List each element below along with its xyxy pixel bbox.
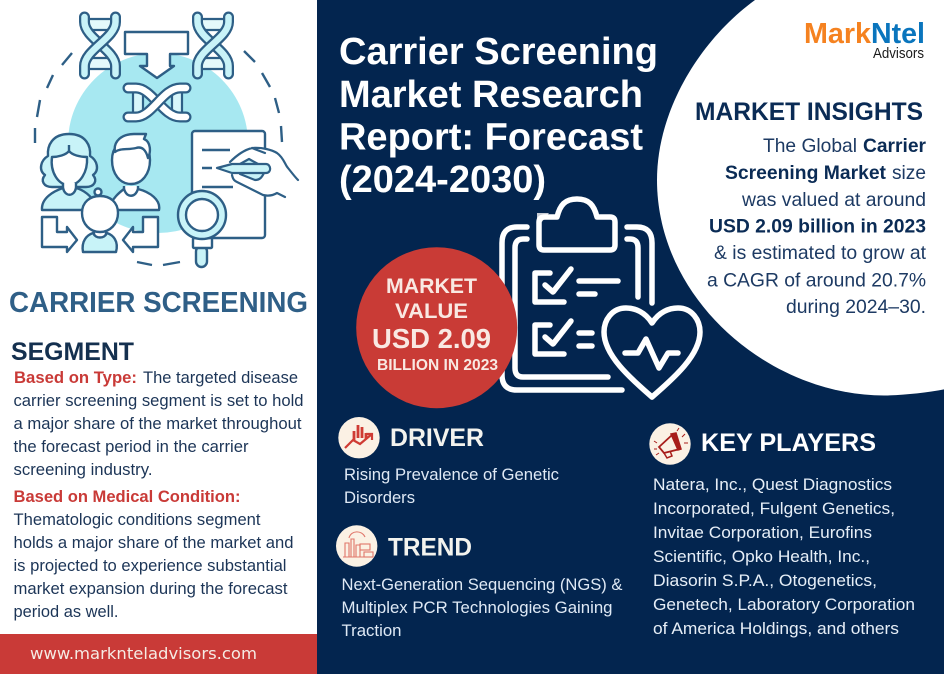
icon: father — [108, 134, 159, 210]
icon: right arrow to child — [123, 217, 158, 252]
icon: lab equipment — [336, 525, 377, 567]
heading: trend: TREND — [388, 534, 472, 562]
panel: white insights curve — [657, 0, 946, 396]
text: driver detail: Rising Prevalence of Genetic — [344, 465, 559, 484]
icon: horizontal DNA — [128, 88, 186, 117]
text block: based on type: The targeted disease — [143, 368, 298, 387]
text: key players list: Natera, Inc., Quest Diagnostics — [653, 475, 892, 494]
text block: market insights: USD 2.09 billion in 2023 — [709, 216, 926, 238]
icon: document — [192, 131, 265, 238]
text block: market insights: a CAGR of around 20.7% — [707, 270, 926, 292]
text: key players list: Diasorin S.P.A., Otogenetics, — [653, 571, 877, 590]
text block: based on type: carrier screening segment is set to hold — [14, 391, 304, 410]
icon: clipboard with heart — [502, 199, 700, 397]
icon: rising chart — [338, 417, 380, 458]
section: driver — [338, 417, 559, 507]
text: key players list: Genetech, Laboratory Corporation — [653, 595, 915, 614]
text block: market insights — [707, 135, 927, 318]
text: key players list: of America Holdings, and others — [653, 619, 899, 638]
teal backdrop circle — [68, 53, 248, 233]
text block: market insights: size — [892, 162, 926, 184]
text: key players list: Scientific, Opko Health, Inc., — [653, 547, 870, 566]
callout: market value: MARKET — [386, 274, 477, 298]
icon: megaphone — [649, 423, 691, 465]
text block: market insights: Carrier — [863, 135, 926, 157]
text: trend detail: Next-Generation Sequencing (NGS) & — [342, 575, 622, 594]
icon: left arrow to child — [42, 217, 77, 252]
section: key players — [649, 423, 915, 638]
text: driver detail: Disorders — [344, 488, 415, 507]
text block: based on medical condition: period as well. — [14, 602, 118, 621]
panel: left illustration — [35, 17, 298, 267]
icon: hand with pen — [217, 148, 298, 197]
text block: based on type: screening industry. — [14, 460, 152, 479]
text block: based on medical condition — [14, 487, 294, 621]
text block: based on type: a major share of the market throughout — [14, 414, 302, 433]
logo: Mark — [804, 18, 872, 50]
text block: market insights: The Global — [763, 135, 857, 157]
heading: segment: SEGMENT — [11, 338, 134, 366]
title: (2024-2030) — [339, 159, 546, 201]
footer bar — [0, 634, 317, 674]
text block: based on medical condition: Thematologic conditions segment — [14, 510, 261, 529]
callout: market value — [356, 247, 517, 408]
text block: based on medical condition: market expansion during the forecast — [14, 579, 288, 598]
callout: market value: USD 2.09 — [372, 323, 491, 354]
text: key players list: Invitae Corporation, Eurofins — [653, 523, 872, 542]
text: trend detail: Multiplex PCR Technologies Gaining — [342, 598, 612, 617]
icon: magnifier — [178, 191, 226, 267]
logo — [804, 18, 925, 62]
heading: driver: DRIVER — [390, 424, 484, 452]
text block: based on medical condition: holds a major share of the market and — [14, 533, 294, 552]
icon: left DNA helix — [84, 17, 116, 74]
logo: Advisors — [873, 45, 924, 62]
icon: mother — [41, 134, 97, 210]
text: key players list — [653, 475, 915, 638]
text: key players list: Incorporated, Fulgent Genetics, — [653, 499, 895, 518]
text block: based on medical condition: Based on Medical Condition: — [14, 487, 240, 506]
logo: Ntel — [871, 18, 925, 50]
text block: market insights: Screening Market — [725, 162, 887, 184]
text block: based on type: Based on Type: — [14, 368, 137, 387]
text block: based on medical condition: is projected to experience substantial — [14, 556, 286, 575]
section: trend — [336, 525, 622, 640]
heading: key players: KEY PLAYERS — [701, 430, 876, 457]
title: Market Research — [339, 74, 643, 116]
text block: market insights: was valued at around — [741, 189, 926, 211]
icon: down arrow — [125, 32, 188, 78]
title — [339, 31, 658, 201]
text block: market insights: & is estimated to grow at — [714, 242, 927, 264]
panel: navy main background — [317, 0, 944, 674]
text block: based on type — [14, 368, 304, 479]
heading: market insights: MARKET INSIGHTS — [695, 99, 923, 126]
website url: www.marknteladvisors.com — [30, 644, 257, 663]
callout: market value: VALUE — [395, 299, 468, 323]
heading: carrier screening: CARRIER SCREENING — [9, 286, 308, 318]
callout: market value: BILLION IN 2023 — [377, 357, 498, 374]
text: driver detail — [344, 465, 559, 507]
dashed ring — [35, 51, 282, 265]
icon: child — [82, 188, 118, 252]
text: trend detail: Traction — [342, 621, 402, 640]
title: Report: Forecast — [339, 116, 643, 158]
title: Carrier Screening — [339, 31, 658, 73]
text block: market insights: during 2024–30. — [786, 296, 926, 318]
icon: right DNA helix — [198, 17, 228, 74]
text: trend detail — [342, 575, 622, 640]
text block: based on type: the forecast period in the carrier — [14, 437, 249, 456]
